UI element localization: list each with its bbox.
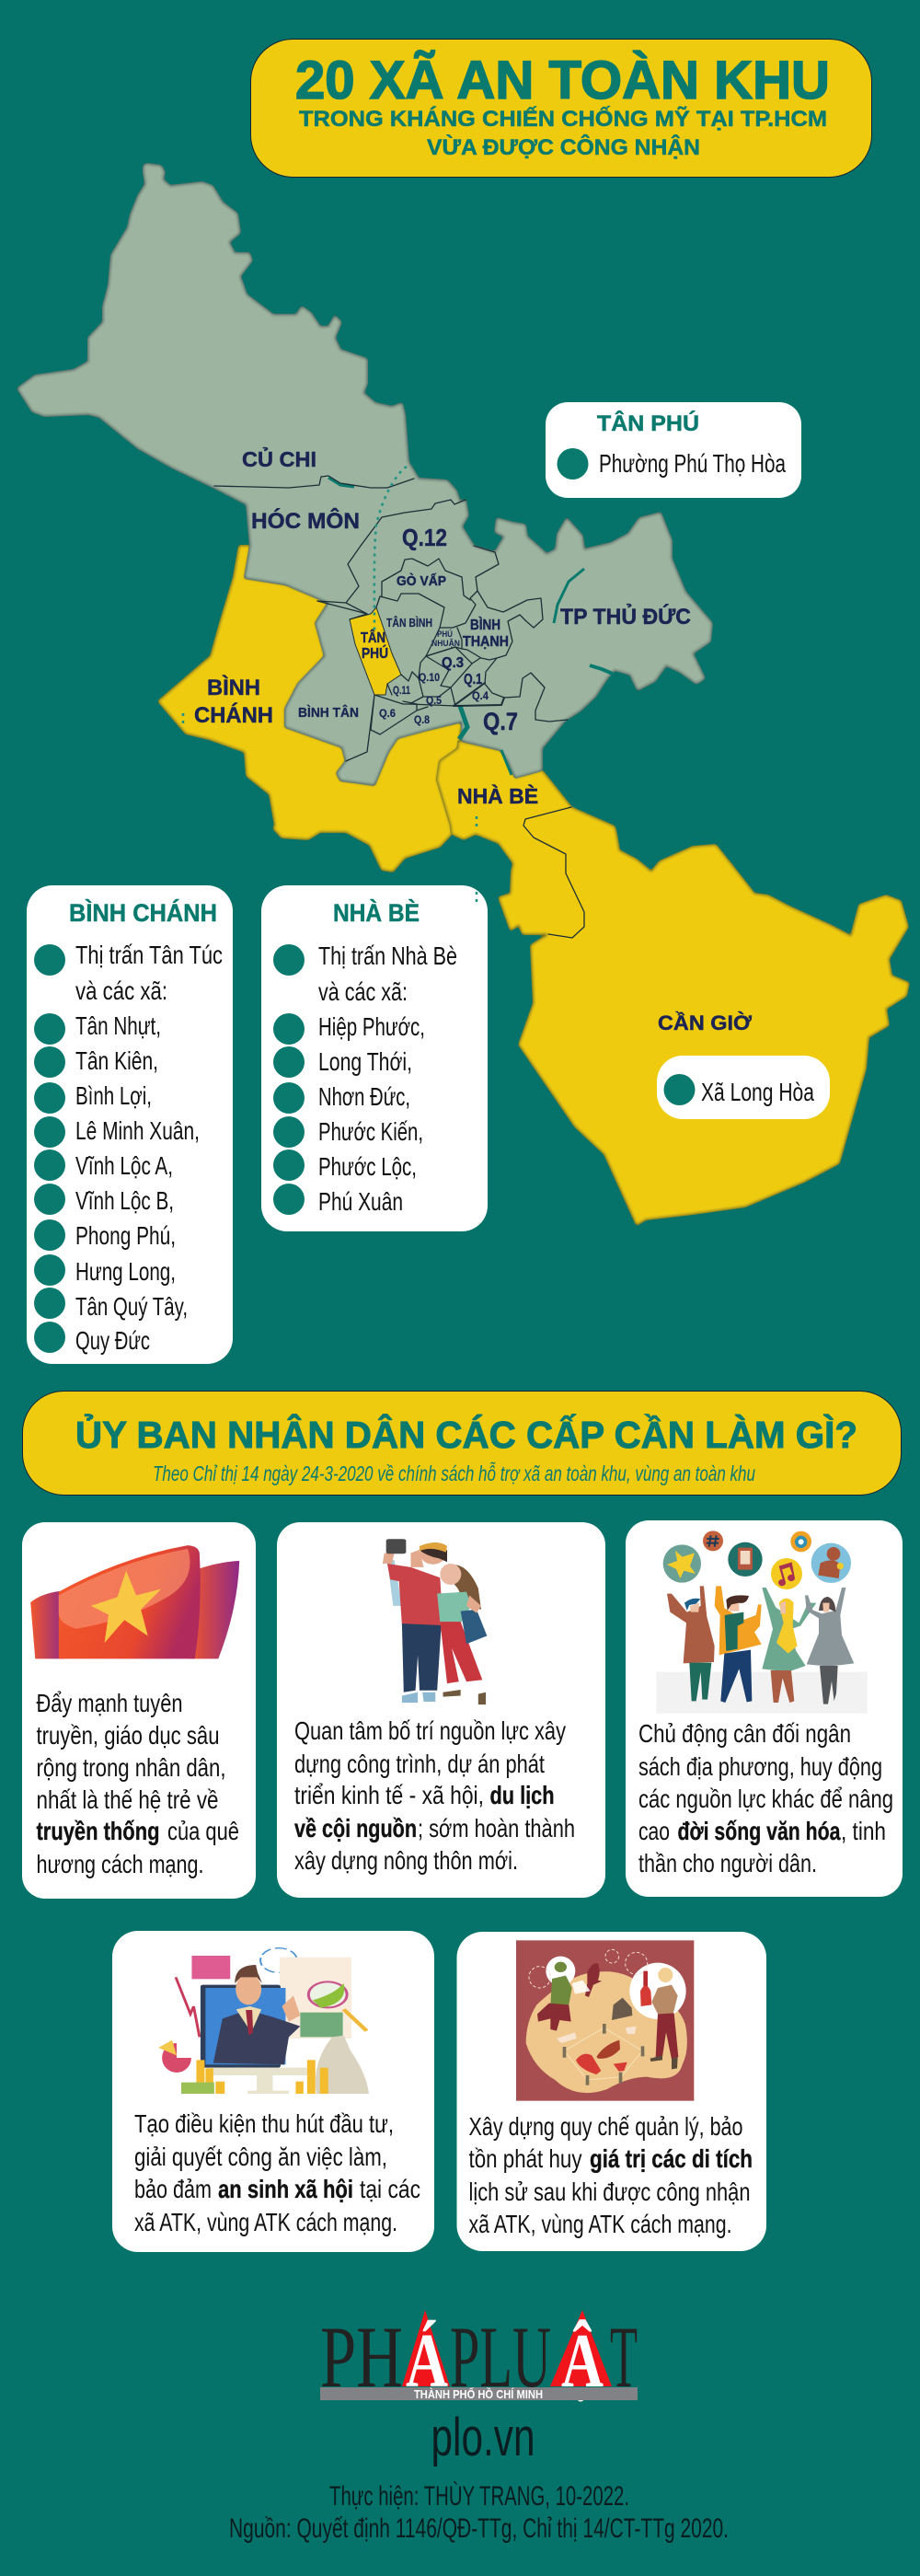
panel: Nhà Bè list xyxy=(261,885,488,1231)
panel: card 3 cultural life: đời sống văn hóa xyxy=(677,1817,841,1845)
panel: card 1 propaganda: truyền thống xyxy=(37,1817,160,1845)
logo: Pháp Luật xyxy=(320,2308,638,2406)
panel: Nhà Bè list: NHÀ BÈ xyxy=(333,898,420,927)
map labels: Q.11 xyxy=(393,684,410,697)
panel: Nhà Bè list: Phú Xuân xyxy=(318,1187,403,1216)
panel: card 4 investment: Tạo điều kiện thu hút đầu tư, xyxy=(134,2109,394,2138)
map labels xyxy=(194,445,752,1034)
panel: card 5 heritage sites xyxy=(456,1932,766,2251)
map labels: Q.5 xyxy=(426,694,442,707)
panel: Bình Chánh list: Vĩnh Lộc A, xyxy=(75,1151,173,1180)
panel: card 2 heritage tourism: ; sớm hoàn thành xyxy=(418,1814,575,1842)
panel: Bình Chánh list: Tân Kiên, xyxy=(75,1046,158,1075)
logo: Pháp Luật: THÀNH PHỐ HỒ CHÍ MINH xyxy=(414,2387,543,2401)
map labels: Q.4 xyxy=(472,689,489,702)
panel: card 2 heritage tourism: Quan tâm bố trí nguồn lực xây xyxy=(294,1716,566,1745)
logo: Pháp Luật: T xyxy=(610,2308,638,2406)
panel: Tân Phú: Phường Phú Thọ Hòa xyxy=(599,449,786,478)
panel: Xã Long Hòa: Xã Long Hòa xyxy=(701,1078,814,1106)
panel: card 2 heritage tourism: xây dựng nông thôn mới. xyxy=(294,1846,518,1875)
icon: crowd with media bubbles xyxy=(656,1531,868,1714)
panel: card 2 heritage tourism: dựng công trình, dự án phát xyxy=(294,1750,545,1778)
map labels: CẦN GIỜ xyxy=(658,1011,752,1034)
panel: card 4 investment: an sinh xã hội xyxy=(218,2175,353,2203)
map labels: BÌNH TÂN xyxy=(298,704,359,721)
icon: flag banner xyxy=(30,1545,239,1658)
icon: businessman on monitor xyxy=(158,1948,369,2094)
map labels: CHÁNH xyxy=(194,702,273,728)
panel: Nhà Bè list: Hiệp Phước, xyxy=(318,1012,425,1041)
map labels: THẠNH xyxy=(463,634,509,650)
panel: Tân Phú xyxy=(546,402,801,498)
website: plo.vn xyxy=(431,2408,535,2467)
panel: Bình Chánh list: Tân Quý Tây, xyxy=(75,1292,188,1321)
map labels: NHÀ BÈ xyxy=(457,783,538,808)
panel: card 3 cultural life: Chủ động cân đối ngân xyxy=(638,1719,851,1748)
panel: card 5 heritage sites: lịch sử sau khi được công nhận xyxy=(469,2177,751,2206)
map labels: Q.8 xyxy=(414,713,430,726)
panel: card 2 heritage tourism: triển kinh tế - xã hội, xyxy=(294,1781,484,1809)
panel: card 3 cultural life: cao xyxy=(638,1817,670,1845)
map labels: Q.10 xyxy=(419,671,440,684)
map labels: GÒ VẤP xyxy=(397,572,446,589)
panel: Nhà Bè list: Thị trấn Nhà Bè xyxy=(318,941,457,970)
panel: card 4 investment xyxy=(112,1931,434,2252)
credits xyxy=(229,2481,729,2544)
panel: card 2 heritage tourism: về cội nguồn xyxy=(294,1814,417,1842)
panel: Bình Chánh list: và các xã: xyxy=(75,976,167,1005)
panel: card 1 propaganda: của quê xyxy=(167,1817,239,1845)
panel: card 2 heritage tourism: du lịch xyxy=(489,1781,554,1809)
panel: card 5 heritage sites: tồn phát huy xyxy=(469,2144,581,2173)
panel: card 2 heritage tourism xyxy=(277,1522,605,1898)
map of Ho Chi Minh City xyxy=(17,164,909,1225)
map labels: BÌNH xyxy=(207,675,260,700)
map labels: PHÚ xyxy=(437,629,453,640)
panel: Xã Long Hòa xyxy=(657,1056,830,1119)
panel: card 1 propaganda: truyền, giáo dục sâu xyxy=(37,1721,219,1750)
map labels: NHUẬN xyxy=(431,638,460,649)
panel: card 4 investment: bảo đảm xyxy=(134,2175,212,2203)
section banner: what committees must do xyxy=(22,1392,902,1495)
district boundaries xyxy=(214,476,414,488)
map labels: Q.3 xyxy=(442,655,464,671)
panel: Bình Chánh list: Thị trấn Tân Túc xyxy=(75,941,223,969)
panel: card 4 investment: xã ATK, vùng ATK cách mạng. xyxy=(134,2208,397,2236)
map labels: Q.12 xyxy=(402,524,447,551)
title banner xyxy=(250,39,872,177)
icon: tourist couple xyxy=(383,1539,487,1704)
panel: card 1 propaganda: rộng trong nhân dân, xyxy=(37,1753,226,1782)
panel: Bình Chánh list: Hưng Long, xyxy=(75,1257,176,1286)
map labels: PHÚ xyxy=(362,644,388,662)
map labels: HÓC MÔN xyxy=(251,508,360,534)
subtitle line 1: TRONG KHÁNG CHIẾN CHỐNG MỸ TẠI TP.HCM xyxy=(299,106,827,132)
panel: Bình Chánh list: Vĩnh Lộc B, xyxy=(75,1186,174,1215)
panel: card 4 investment: tại các xyxy=(360,2175,420,2203)
region: grey northern and central districts xyxy=(17,164,712,785)
map labels: Q.7 xyxy=(483,708,518,735)
panel: card 5 heritage sites: giá trị các di tích xyxy=(590,2144,753,2173)
panel: card 3 cultural life xyxy=(626,1520,903,1897)
panel: Nhà Bè list: Long Thới, xyxy=(318,1047,412,1076)
panel: card 1 propaganda xyxy=(22,1522,256,1899)
map labels: TÂN xyxy=(361,629,385,646)
panel: Bình Chánh list: Bình Lợi, xyxy=(75,1081,152,1110)
river Nhà Bè and Cần Giờ xyxy=(523,807,584,938)
panel: Nhà Bè list: và các xã: xyxy=(318,977,408,1006)
panel: Bình Chánh list: BÌNH CHÁNH xyxy=(69,898,217,927)
panel: Nhà Bè list: Phước Kiến, xyxy=(318,1117,423,1146)
section banner: what committees must do: ỦY BAN NHÂN DÂN CÁC CẤP CẦN LÀM GÌ? xyxy=(75,1414,857,1456)
region: Bình Chánh yellow xyxy=(158,546,462,872)
logo: Pháp Luật: Á xyxy=(406,2318,448,2404)
subtitle line 2: VỪA ĐƯỢC CÔNG NHẬN xyxy=(427,134,700,160)
main title: 20 XÃ AN TOÀN KHU xyxy=(295,51,830,110)
map labels: TP THỦ ĐỨC xyxy=(560,603,691,630)
map labels: CỦ CHI xyxy=(242,445,316,471)
panel: Bình Chánh list: Lê Minh Xuân, xyxy=(75,1116,200,1145)
logo: Pháp Luật: Ậ xyxy=(561,2318,604,2404)
panel: card 3 cultural life: , tinh xyxy=(841,1817,886,1845)
metro dotted line xyxy=(374,467,407,635)
region: Tân Phú yellow xyxy=(350,607,401,695)
panel: Nhà Bè list: Phước Lộc, xyxy=(318,1152,417,1181)
panel: card 1 propaganda: nhất là thế hệ trẻ về xyxy=(37,1785,219,1814)
map labels: Q.6 xyxy=(379,707,396,720)
map labels: Q.1 xyxy=(464,672,482,687)
panel: card 1 propaganda: Đẩy mạnh tuyên xyxy=(37,1689,182,1717)
panel: card 4 investment: giải quyết công ăn việc làm, xyxy=(134,2143,387,2171)
panel: Tân Phú: TÂN PHÚ xyxy=(597,410,699,436)
panel: Bình Chánh list: Tân Nhựt, xyxy=(75,1011,161,1040)
panel: Bình Chánh list: Phong Phú, xyxy=(75,1221,176,1250)
icon: archaeological site xyxy=(516,1940,694,2101)
map labels: BÌNH xyxy=(470,616,500,633)
panel: Bình Chánh list xyxy=(27,885,233,1364)
panel: card 5 heritage sites: xã ATK, vùng ATK cách mạng. xyxy=(469,2210,732,2238)
region: Nhà Bè and Cần Giờ yellow xyxy=(437,741,909,1225)
panel: Nhà Bè list: Nhơn Đức, xyxy=(318,1082,410,1111)
logo: Pháp Luật: PH xyxy=(320,2308,403,2406)
panel: card 3 cultural life: thần cho người dân. xyxy=(638,1849,817,1877)
map labels: TÂN BÌNH xyxy=(386,616,432,630)
logo: Pháp Luật: PLU xyxy=(450,2308,551,2406)
rivers xyxy=(459,706,467,739)
panel: card 1 propaganda: hương cách mạng. xyxy=(37,1850,204,1878)
panel: card 5 heritage sites: Xây dựng quy chế quản lý, bảo xyxy=(469,2112,743,2141)
panel: Bình Chánh list: Quy Đức xyxy=(75,1326,150,1355)
credits: Thực hiện: THÙY TRANG, 10-2022. xyxy=(329,2481,629,2512)
